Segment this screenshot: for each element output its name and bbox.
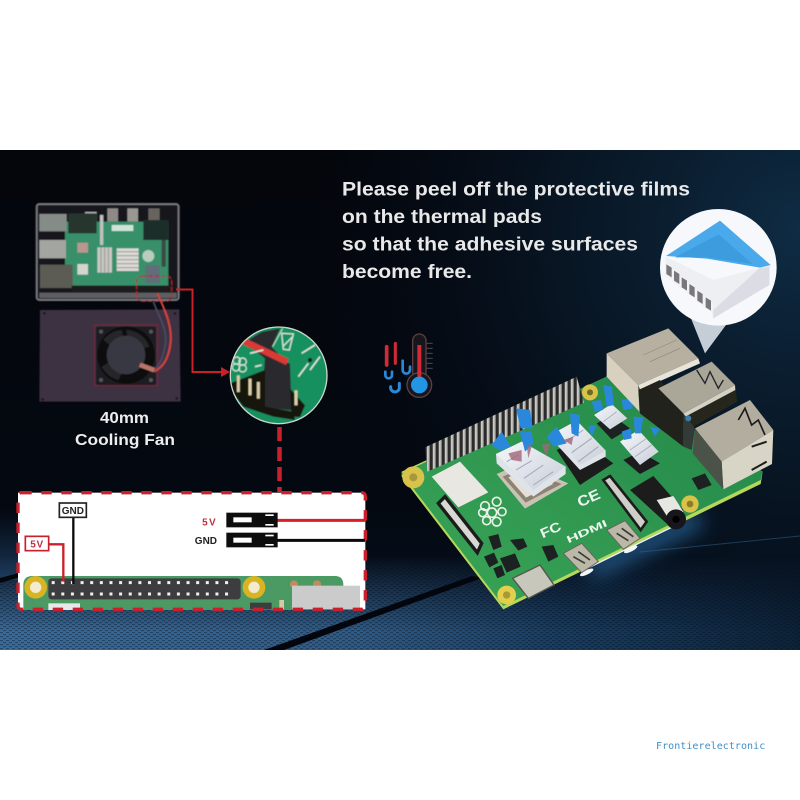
heading: peel off instructions bbox=[342, 180, 690, 283]
heading: peel off instructions: so that the adhesive surfaces bbox=[342, 234, 638, 256]
label: 5V pin: 5V bbox=[30, 539, 44, 550]
board markings: HDMI bbox=[565, 518, 609, 546]
heading: peel off instructions: Please peel off the protective films bbox=[342, 180, 690, 200]
arrow: from header to zoomed connector bbox=[176, 290, 230, 377]
fan connector: 5V: 5V bbox=[202, 518, 217, 529]
mini HDMI ports bbox=[563, 521, 640, 573]
red highlight around header bbox=[137, 276, 172, 301]
dark background band bbox=[0, 150, 800, 650]
heading: peel off instructions: become free. bbox=[342, 262, 472, 283]
GPIO header bbox=[425, 377, 584, 472]
Raspberry Pi logo bbox=[479, 497, 506, 526]
case body bbox=[37, 204, 179, 300]
heading: peel off instructions: on the thermal pads bbox=[342, 207, 542, 228]
Ethernet port bbox=[607, 328, 700, 447]
CSI and display connectors bbox=[438, 497, 482, 553]
PCB bbox=[402, 377, 763, 609]
small board components bbox=[484, 473, 712, 578]
watermark: Frontierelectronic bbox=[656, 741, 765, 752]
dashed connector line to wiring panel bbox=[277, 427, 282, 492]
upper USB port bbox=[658, 362, 737, 450]
label: GND pin bbox=[59, 503, 86, 584]
dark chips bbox=[557, 438, 613, 485]
GPIO board strip bbox=[23, 576, 360, 610]
medium heat sink bbox=[553, 421, 606, 470]
lower USB port bbox=[693, 400, 773, 489]
audio jack bbox=[630, 476, 686, 529]
label: 5V pin bbox=[25, 536, 63, 582]
caption: 40mm Cooling Fan: Cooling Fan bbox=[75, 432, 175, 449]
small heat sinks bbox=[594, 404, 659, 465]
panel: GPIO wiring diagram bbox=[18, 493, 365, 610]
fan connector: GND: GND bbox=[195, 536, 217, 547]
white connector bbox=[432, 462, 488, 507]
label: GND pin: GND bbox=[62, 506, 84, 517]
blue thermal pad films bbox=[492, 385, 660, 452]
mounting holes bbox=[402, 466, 424, 488]
inset: zoomed fan connector bbox=[230, 326, 330, 425]
board markings: FC bbox=[538, 519, 564, 541]
callout: heat sink with peeled film bbox=[660, 209, 777, 353]
glow beneath board bbox=[590, 518, 700, 570]
photo: Raspberry Pi 4 board with heat sinks bbox=[402, 328, 773, 609]
icon: thermometer with drops bbox=[385, 334, 433, 397]
caption: 40mm Cooling Fan: 40mm bbox=[100, 410, 149, 427]
dashed red border bbox=[18, 493, 365, 609]
USB-C port bbox=[513, 565, 554, 598]
caption: 40mm Cooling Fan bbox=[75, 410, 175, 449]
board markings bbox=[538, 487, 609, 546]
fan connector: 5V bbox=[202, 513, 365, 529]
board markings: CE bbox=[575, 487, 603, 511]
photo: Raspberry Pi in case with 40mm fan bbox=[37, 204, 181, 402]
fan plate bbox=[39, 293, 181, 402]
fan connector: GND bbox=[195, 533, 365, 547]
SoC frame bbox=[497, 463, 568, 509]
big heat sink bbox=[496, 442, 566, 497]
